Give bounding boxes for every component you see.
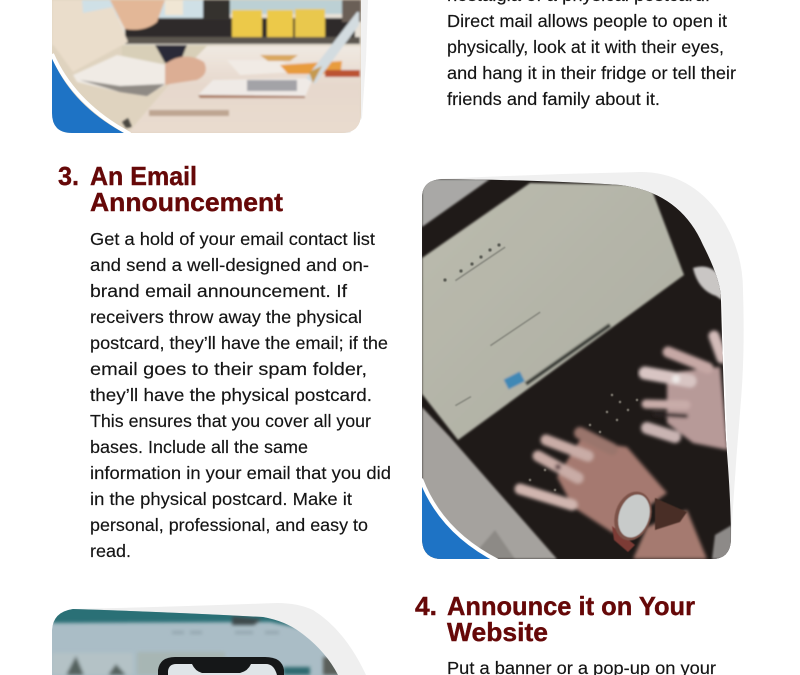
heading: step 4: 4. bbox=[415, 591, 437, 621]
text: step 3 paragraph: postcard, they’ll have the email; if the bbox=[90, 333, 388, 353]
text: end of step 2 paragraph: physically, look at it with their eyes, bbox=[447, 37, 724, 57]
text: step 3 paragraph: This ensures that you cover all your bbox=[90, 411, 371, 431]
text: step 3 paragraph: personal, professional, and easy to bbox=[90, 515, 368, 535]
text: step 3 paragraph: read. bbox=[90, 541, 131, 561]
text: end of step 2 paragraph bbox=[447, 0, 736, 109]
text: step 3 paragraph: email goes to their spam folder, bbox=[90, 359, 367, 379]
icon: blue corner accent bbox=[52, 58, 124, 133]
right hand bbox=[645, 336, 728, 450]
heading: step 3: 3. bbox=[58, 161, 79, 191]
heading: step 3: Announcement bbox=[90, 187, 283, 217]
text: end of step 2 paragraph: Direct mail allows people to open it bbox=[447, 11, 727, 31]
text: step 3 paragraph: Get a hold of your email contact list bbox=[90, 229, 375, 249]
heading: step 4: Announce it on Your bbox=[447, 591, 695, 621]
text: step 3 paragraph: receivers throw away the physical bbox=[90, 307, 362, 327]
panel: office photo with laptop bbox=[52, 0, 368, 134]
text: step 3 paragraph: in the physical postcard. Make it bbox=[90, 489, 352, 509]
text: end of step 2 paragraph: and hang it in their fridge or tell their bbox=[447, 63, 736, 83]
text: step 3 paragraph: information in your email that you did bbox=[90, 463, 391, 483]
text: step 3 paragraph: and send a well-designed and on- bbox=[90, 255, 369, 275]
icon: blue corner accent bbox=[422, 483, 492, 559]
heading: step 4 bbox=[415, 591, 695, 647]
icon: wristwatch bbox=[608, 487, 687, 552]
panel: photo of website on phone bbox=[52, 603, 366, 675]
left hand bbox=[520, 433, 707, 559]
text: step 3 paragraph: they’ll have the physical postcard. bbox=[90, 385, 372, 405]
heading: step 4: Website bbox=[447, 617, 548, 647]
text: end of step 2 paragraph: friends and family about it. bbox=[447, 89, 660, 109]
panel: photo of hands typing on laptop bbox=[421, 172, 744, 561]
text: step 3 paragraph: brand email announcement. If bbox=[90, 281, 347, 301]
text: step 3 paragraph bbox=[90, 229, 391, 561]
heading: step 3 bbox=[58, 161, 283, 217]
icon: smartphone bbox=[158, 657, 284, 675]
text: step 3 paragraph: bases. Include all the same bbox=[90, 437, 308, 457]
heading: step 3: An Email bbox=[90, 161, 197, 191]
